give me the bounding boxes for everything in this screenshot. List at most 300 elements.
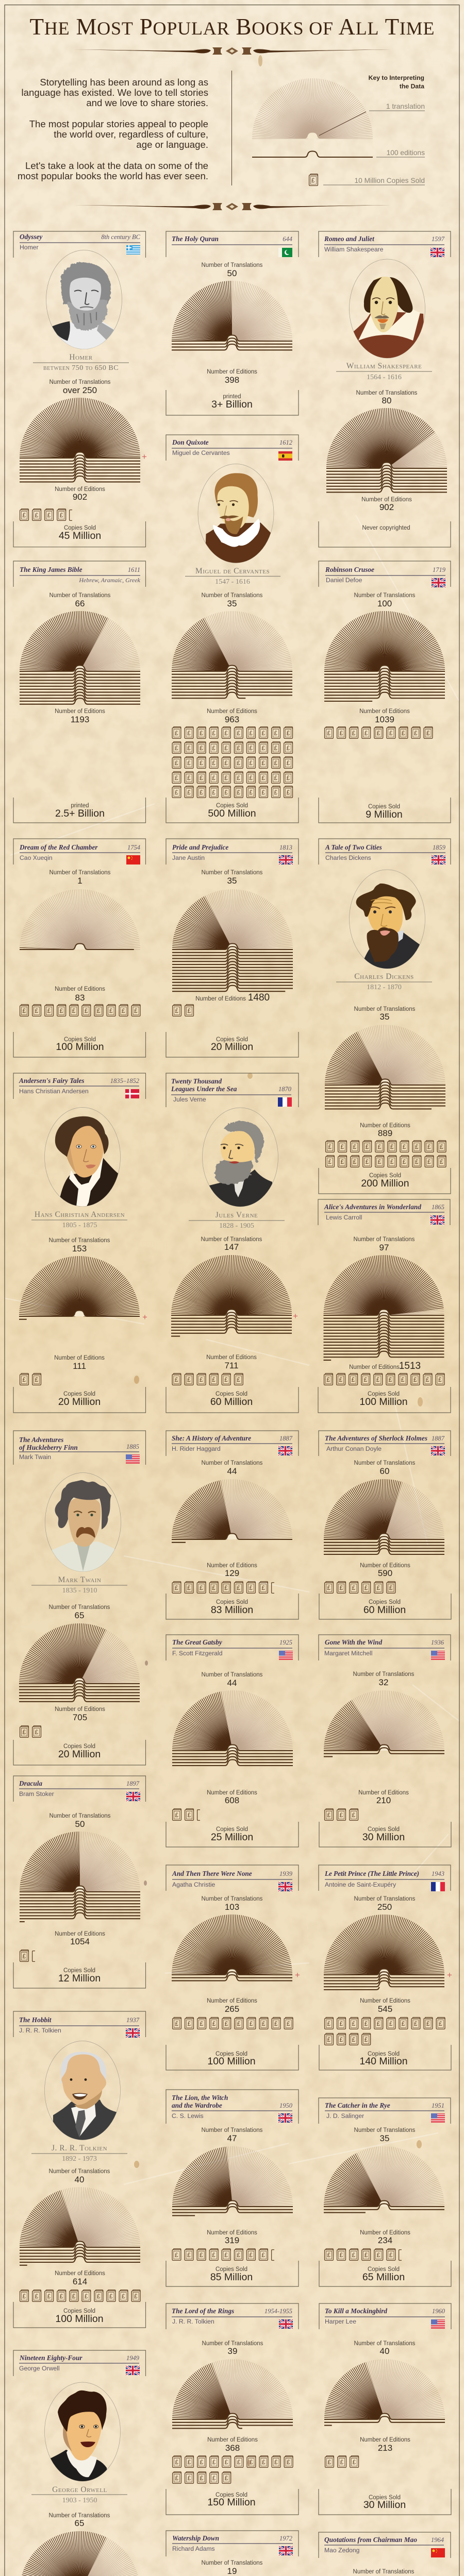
card: She: A History of Adventure [166, 1431, 304, 1619]
editions: 210 [376, 1795, 391, 1805]
header: Leagues Under the Sea [171, 1085, 237, 1093]
editions: Number of Editions [55, 486, 105, 493]
author name: Charles Dickens [354, 972, 414, 981]
footer: 60 Million [210, 1396, 253, 1408]
footer: Copies Sold [216, 2492, 247, 2498]
editions: Number of Editions [349, 1364, 400, 1370]
header: The Catcher in the Rye [325, 2102, 390, 2109]
books: ££££££££££ [175, 731, 299, 737]
books: ££££££££££ [23, 2294, 146, 2300]
card: Le Petit Prince [319, 1865, 456, 2070]
translations: 100 [377, 599, 392, 608]
translations [354, 2341, 416, 2356]
translations: 66 [75, 599, 85, 608]
translations: Number of Translations [202, 2560, 263, 2566]
editions [360, 2437, 410, 2453]
header: The Great Gatsby [172, 1638, 222, 1646]
footer [13, 798, 145, 823]
books: ££ [175, 1008, 200, 1014]
fan chart [19, 1623, 140, 1702]
header: H. Rider Haggard [172, 1445, 221, 1452]
author name: between 750 to 650 BC [43, 364, 119, 372]
books: ££££££ [327, 1585, 402, 1591]
editions [207, 369, 257, 385]
header: Agatha Christie [172, 1881, 216, 1888]
header: Watership Down [172, 2534, 219, 2542]
title: THE MOST POPULAR BOOKS OF ALL TIME [30, 14, 434, 40]
fan chart [20, 2175, 152, 2278]
translations: Number of Translations [202, 592, 263, 599]
translations: Number of Translations [356, 390, 418, 396]
translations: Number of Translations [202, 2127, 263, 2133]
footer: 500 Million [208, 808, 256, 819]
books [20, 2290, 146, 2301]
author name [31, 1575, 127, 1595]
header: Twenty Thousand [171, 1077, 222, 1085]
editions: 590 [378, 1568, 392, 1578]
header: Richard Adams [172, 2545, 215, 2552]
card: Romeo and Juliet [319, 231, 459, 547]
header: Nineteen Eighty-Four [19, 2354, 82, 2362]
books: ££££££ [327, 2252, 402, 2259]
translations: Number of Translations [49, 592, 111, 599]
card: A Tale of Two Cities [319, 839, 457, 1194]
translations: Number of Translations [354, 1460, 416, 1466]
author name: 1835 - 1910 [62, 1587, 97, 1595]
books [20, 1005, 146, 1016]
key heading: Key to Interpreting [369, 74, 424, 81]
intro text: and we love to share stories. [86, 97, 208, 108]
editions [207, 1998, 257, 2014]
author name: 1903 - 1950 [62, 2497, 97, 2504]
fan chart [172, 269, 304, 371]
header: George Orwell [19, 2365, 60, 2372]
author name: William Shakespeare [346, 362, 422, 370]
intro text: age or language. [136, 139, 208, 150]
header: Hans Christian Andersen [19, 1088, 89, 1095]
footer: Copies Sold [63, 1391, 95, 1397]
books [325, 2456, 365, 2467]
header: She: A History of Adventure [172, 1434, 251, 1442]
fan chart [20, 1820, 152, 1922]
translations: Number of Translations [202, 1672, 263, 1678]
translations: Number of Translations [49, 1604, 110, 1611]
header [166, 231, 299, 257]
books [20, 1726, 47, 1737]
translations: 65 [75, 2518, 84, 2528]
header: Charles Dickens [325, 854, 371, 861]
intro text: Storytelling has been around as long as [40, 77, 208, 88]
portrait: George Orwell [44, 2382, 121, 2483]
header: 1885 [126, 1443, 139, 1450]
header [13, 561, 145, 587]
key fan: 1 translation [252, 66, 385, 169]
header: 1835–1852 [110, 1077, 139, 1084]
fan chart [172, 1679, 305, 1781]
header [13, 2350, 145, 2376]
footer: 200 Million [361, 1178, 409, 1189]
books: ££££ [327, 2037, 377, 2043]
plus sign: + [447, 1970, 452, 1980]
header: 1612 [279, 439, 292, 446]
books: £££££££££ [327, 731, 439, 737]
editions: Number of Editions [206, 1354, 257, 1361]
books: ££ [23, 1730, 47, 1736]
card: Alice's Adventures in Wonderland [318, 1199, 456, 1413]
books: ££££££££ [175, 2252, 274, 2259]
editions: Number of Editions [55, 1706, 105, 1713]
editions: Number of Editions [207, 1563, 257, 1569]
books [173, 1809, 200, 1820]
footer: 12 Million [58, 1973, 101, 1984]
portrait: William Shakespeare [349, 259, 425, 360]
header: Daniel Defoe [326, 577, 362, 584]
translations: 44 [227, 1678, 237, 1688]
fan chart [172, 1467, 304, 1570]
card: Nineteen Eighty-Four [13, 2350, 152, 2576]
footer: 30 Million [362, 1832, 405, 1843]
header: Jules Verne [173, 1096, 206, 1103]
footer [13, 1387, 145, 1413]
translations: Number of Translations [354, 1896, 416, 1902]
card: Pride and Prejudice [166, 839, 305, 1057]
header: 1972 [279, 2535, 292, 2542]
translations: 35 [380, 2133, 389, 2143]
editions: Number of Editions [360, 2437, 410, 2443]
header: 1870 [278, 1086, 292, 1093]
editions: 889 [378, 1128, 392, 1138]
header: Antoine de Saint-Exupéry [325, 1881, 396, 1888]
editions [349, 1361, 421, 1371]
books [324, 1374, 451, 1385]
footer: Never copyrighted [362, 525, 410, 531]
header: William Shakespeare [324, 246, 384, 253]
header: Cao Xueqin [20, 854, 53, 861]
books: £££££ [175, 2476, 237, 2482]
translations: Number of Translations [354, 592, 416, 599]
translations: 35 [380, 1012, 389, 1022]
translations [354, 2127, 416, 2143]
author name: Jules Verne [216, 1211, 258, 1219]
translations: Number of Translations [49, 1238, 110, 1244]
header [13, 1431, 145, 1465]
books: ££££££££££ [327, 2021, 451, 2027]
plus sign: + [293, 1311, 298, 1321]
header [166, 2090, 299, 2124]
header: 1897 [126, 1780, 140, 1787]
portrait: Miguel de Cervantes [198, 464, 274, 565]
books: ££££££££££ [175, 760, 299, 767]
fan chart [172, 2347, 305, 2450]
header: 1936 [431, 1639, 444, 1646]
footer: 45 Million [59, 530, 101, 541]
intro text: Let's take a look at the data on some of the [25, 160, 208, 171]
footer [13, 1962, 145, 1988]
author name: Homer [69, 353, 93, 362]
footer: Copies Sold [216, 1037, 248, 1043]
author name [31, 1210, 127, 1229]
editions: Number of Editions [207, 1790, 257, 1796]
header: The Lord of the Rings [172, 2307, 234, 2315]
translations: 97 [379, 1243, 389, 1252]
footer [13, 521, 145, 547]
header [13, 2011, 145, 2038]
footer: 140 Million [359, 2056, 408, 2067]
translations: 32 [379, 1677, 388, 1687]
books [20, 509, 72, 520]
author name [33, 353, 129, 372]
books [173, 2018, 299, 2029]
translations: 80 [382, 396, 391, 405]
footer: Copies Sold [216, 2266, 247, 2273]
author name [31, 2144, 127, 2163]
footer [13, 1740, 145, 1765]
header: Andersen's Fairy Tales [19, 1077, 85, 1084]
footer: 20 Million [211, 1041, 253, 1053]
fan chart [326, 396, 459, 499]
header: 1960 [432, 2308, 445, 2315]
footer: 100 Million [359, 1396, 408, 1408]
header [319, 839, 451, 865]
translations [354, 1460, 416, 1476]
key line: 100 editions [252, 149, 425, 157]
author name [189, 1211, 285, 1230]
editions: 129 [225, 1568, 239, 1578]
editions: 711 [224, 1361, 239, 1370]
header [319, 1431, 451, 1456]
editions [195, 992, 270, 1003]
card: Quotations from Chairman Mao [319, 2532, 456, 2576]
books: ££££ [23, 513, 72, 519]
header: Bram Stoker [19, 1790, 54, 1798]
header: 1813 [279, 844, 292, 851]
translations [49, 2168, 110, 2184]
translations [202, 2127, 263, 2143]
footer: 100 Million [55, 2313, 104, 2325]
translations [202, 262, 263, 278]
header [166, 2303, 299, 2329]
portrait: Charles Dickens [350, 870, 425, 971]
ornament divider top [74, 47, 390, 55]
header [166, 2531, 299, 2556]
card: The Lion, the Witch and the Wardrobe [166, 2090, 305, 2286]
translations [49, 2513, 110, 2528]
editions [207, 708, 257, 724]
header [166, 1865, 299, 1891]
author name: Hans Christian Andersen [35, 1210, 125, 1219]
footer: 25 Million [211, 1832, 253, 1843]
footer: Copies Sold [368, 2051, 400, 2057]
books [20, 1950, 35, 1961]
header: Lewis Carroll [326, 1214, 362, 1221]
header [319, 2303, 451, 2329]
header [166, 839, 299, 865]
editions: Number of Editions [207, 2437, 258, 2443]
editions [55, 2270, 105, 2286]
books: ££££££££££ [23, 1008, 146, 1014]
footer: 85 Million [210, 2272, 253, 2283]
translations [49, 1238, 110, 1253]
footer: Copies Sold [216, 1599, 248, 1605]
books: ££££££££££ [175, 745, 299, 752]
card: To Kill a Mockingbird [319, 2303, 457, 2515]
header: 1954-1955 [264, 2308, 292, 2315]
books [325, 2249, 402, 2260]
card: The Great Gatsby [166, 1635, 305, 1847]
footer: 65 Million [362, 2272, 405, 2283]
header [319, 231, 451, 257]
footer: Copies Sold [64, 1037, 96, 1043]
translations [49, 379, 111, 395]
header [13, 1776, 145, 1802]
header: and the Wardrobe [172, 2102, 222, 2109]
intro text: most popular books the world has ever seen. [18, 171, 208, 181]
header: The Lion, the Witch [172, 2094, 228, 2102]
editions: 1513 [399, 1361, 421, 1371]
header: Margaret Mitchell [324, 1650, 372, 1657]
translations: Number of Translations [202, 2341, 263, 2347]
translations: Number of Translations [49, 379, 111, 385]
header: 1719 [433, 566, 446, 573]
header: The Adventures [19, 1436, 63, 1444]
editions: 902 [73, 492, 87, 502]
fan chart [324, 1467, 456, 1570]
header [166, 1635, 299, 1660]
translations: 47 [227, 2133, 237, 2143]
header: The King James Bible [20, 566, 82, 573]
footer: Copies Sold [369, 2495, 401, 2501]
books [325, 2018, 451, 2045]
header: Robinson Crusoe [325, 566, 374, 573]
footer: Copies Sold [216, 1826, 248, 1833]
fan chart [172, 1903, 304, 2005]
card: Dracula [13, 1776, 152, 1988]
editions [206, 1354, 257, 1370]
translations [354, 592, 416, 608]
footer [166, 2261, 299, 2286]
footer [319, 521, 451, 547]
header: Pride and Prejudice [172, 843, 228, 851]
books: ££ [175, 1812, 200, 1819]
author name [185, 567, 280, 586]
header: 1939 [279, 1870, 293, 1877]
translations: 250 [377, 1902, 392, 1912]
header [319, 1635, 451, 1660]
header: F. Scott Fitzgerald [172, 1650, 223, 1657]
footer [166, 2045, 299, 2070]
translations: Number of Translations [202, 1460, 263, 1466]
fan chart [324, 2134, 456, 2237]
card: Gone With the Wind [319, 1635, 456, 1847]
footer: 60 Million [363, 1604, 406, 1616]
books [172, 1374, 249, 1385]
fan chart [19, 1244, 152, 1347]
editions [207, 2230, 257, 2245]
translations [202, 1672, 263, 1688]
footer [319, 1168, 451, 1194]
translations [354, 1236, 415, 1252]
card: Robinson Crusoe [319, 561, 457, 823]
translations [354, 1006, 416, 1022]
fan chart [324, 1903, 456, 2005]
translations [202, 1460, 263, 1476]
author name: 1892 - 1973 [62, 2155, 97, 2163]
card: The Hobbit [13, 2011, 152, 2328]
header: To Kill a Mockingbird [325, 2307, 387, 2315]
translations: 65 [75, 1611, 84, 1620]
fan chart [20, 386, 152, 488]
translations [201, 1236, 262, 1252]
key to interpreting the data [252, 66, 425, 185]
header: Jane Austin [172, 854, 205, 861]
editions [55, 1706, 105, 1722]
footer: Copies Sold [368, 2266, 400, 2273]
header [166, 435, 299, 461]
card: Dream of the Red Chamber [13, 839, 152, 1057]
author name: 1812 - 1870 [367, 984, 402, 991]
header: C. S. Lewis [172, 2112, 204, 2120]
translations: Number of Translations [354, 2341, 416, 2347]
translations: 40 [380, 2346, 389, 2356]
footer: Copies Sold [64, 525, 96, 531]
header: Alice's Adventures in Wonderland [324, 1203, 421, 1211]
intro text: the world over, regardless of culture, [54, 129, 208, 140]
footer: 100 Million [207, 2056, 256, 2067]
fan chart [171, 1243, 304, 1346]
author name: George Orwell [52, 2485, 107, 2494]
footer [166, 798, 299, 823]
editions: 608 [225, 1795, 239, 1805]
footer: Copies Sold [369, 1599, 401, 1605]
books [325, 727, 439, 738]
header: A Tale of Two Cities [325, 843, 382, 851]
footer: 9 Million [366, 809, 403, 820]
editions [54, 1355, 105, 1371]
header: 1943 [432, 1870, 444, 1877]
editions: Number of Editions [55, 708, 105, 715]
translations: 35 [227, 876, 237, 886]
editions: 234 [378, 2235, 392, 2245]
editions: Number of Editions [360, 2230, 410, 2236]
translations: 103 [225, 1902, 239, 1912]
editions [207, 1790, 257, 1805]
translations: 50 [227, 268, 237, 278]
ornament divider bottom [74, 203, 390, 210]
fan chart [20, 611, 140, 705]
header: The Holy Quran [172, 235, 219, 243]
footer: Copies Sold [216, 1391, 247, 1397]
footer: Copies Sold [216, 803, 248, 809]
editions: Number of Editions [360, 1123, 410, 1129]
translations: Number of Translations [353, 2569, 415, 2575]
intro text: The most popular stories appeal to people [29, 118, 208, 129]
editions: Number of Editions [207, 1998, 257, 2004]
editions [358, 1790, 409, 1805]
header: Odyssey [20, 233, 42, 241]
author name: 1564 - 1616 [367, 374, 402, 381]
header: Gone With the Wind [325, 1638, 383, 1646]
card: And Then There Were None [166, 1865, 304, 2070]
author name [336, 362, 432, 381]
footer: 20 Million [58, 1749, 101, 1760]
footer [319, 2045, 451, 2070]
key book: 10 million copies sold: 10 Million Copies Sold [354, 177, 425, 184]
translations: Number of Translations [353, 1671, 415, 1677]
portrait: Jules Verne [202, 1108, 278, 1209]
translations: 39 [228, 2346, 237, 2356]
card: Don Quixote [166, 435, 304, 823]
plus sign: + [295, 1970, 300, 1980]
